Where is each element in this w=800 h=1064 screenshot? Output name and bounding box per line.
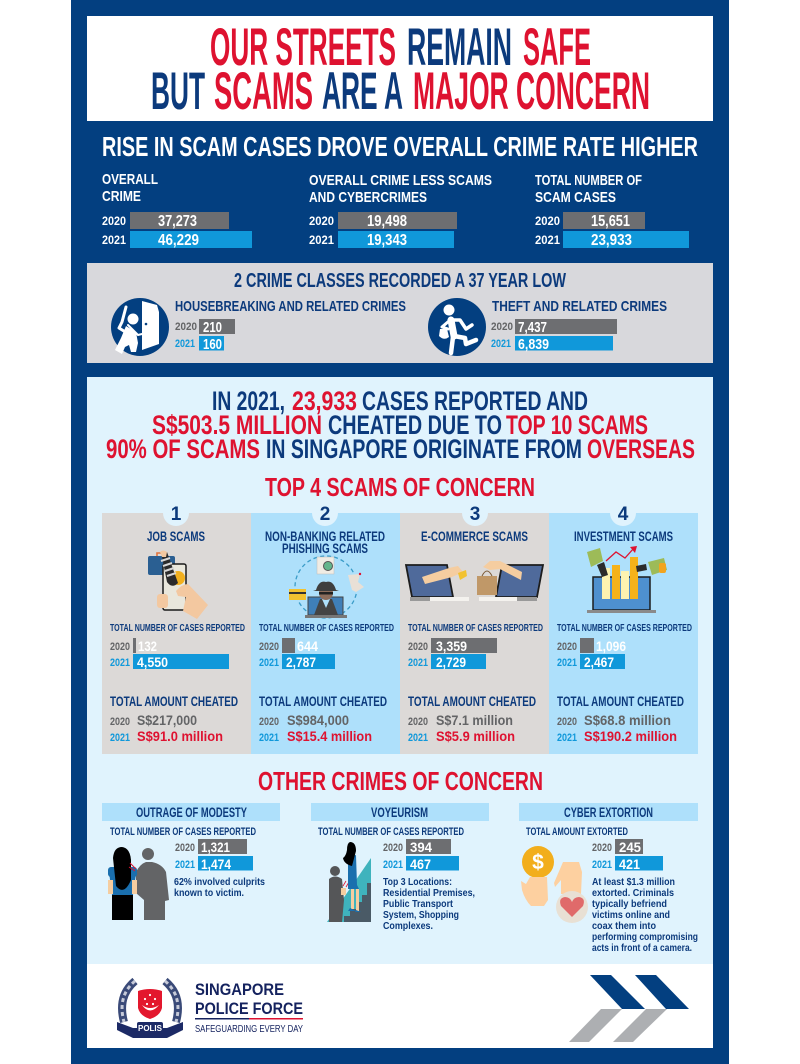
card 4: investment: INVESTMENT SCAMS	[574, 528, 673, 544]
icon: hands, coin and heart	[521, 846, 588, 923]
card 1: job scams: JOB SCAMS	[147, 528, 205, 544]
icon: running thief	[428, 298, 486, 356]
card 4: investment: TOTAL AMOUNT CHEATED	[557, 693, 684, 709]
headline: scam statistics	[106, 386, 695, 464]
icon: investment chart	[587, 546, 667, 613]
panel: cyber extortion: 245	[619, 839, 641, 855]
card 4: investment: 2020	[557, 641, 577, 653]
card 2: phishing: 2	[320, 504, 330, 525]
card 4: investment: 2020	[557, 716, 577, 728]
title: SCAMS	[214, 62, 313, 121]
card 1: job scams: 132	[138, 638, 157, 654]
icon: hands, coin and heart: $	[532, 851, 544, 874]
bars: theft: 2020	[491, 321, 513, 333]
card 4: investment	[549, 504, 698, 754]
stat: overall crime: OVERALL	[102, 171, 158, 188]
panel: cyber extortion: acts in front of a camera.	[592, 942, 692, 954]
title: BUT	[151, 62, 205, 121]
headline: scam statistics: 90% OF SCAMS	[106, 434, 260, 464]
panel: cyber extortion: performing compromising	[592, 931, 698, 943]
title: REMAIN	[407, 18, 512, 77]
headline: scam statistics: CASES REPORTED AND	[362, 386, 588, 416]
headline: scam statistics: IN 2021,	[212, 386, 285, 416]
stat: total number of scam cases: 2021	[535, 233, 560, 247]
panel: outrage of modesty: known to victim.	[174, 887, 244, 899]
panel: cyber extortion	[519, 803, 698, 954]
stat: overall crime less scams and cybercrimes	[309, 172, 492, 249]
card 2: phishing: S$984,000	[287, 712, 349, 728]
stat: total number of scam cases: 23,933	[591, 232, 632, 249]
panel: cyber extortion: 2020	[592, 842, 612, 854]
panel: outrage of modesty: 1,474	[201, 856, 231, 872]
stat: overall crime: 46,229	[158, 232, 199, 249]
panel: outrage of modesty: OUTRAGE OF MODESTY	[136, 805, 247, 820]
card 3: e-commerce: 2020	[408, 716, 428, 728]
stat: total number of scam cases	[535, 172, 689, 249]
stat: overall crime less scams and cybercrimes: 2020	[309, 214, 334, 228]
panel: cyber extortion: coax them into	[592, 920, 656, 932]
bars: theft: 2021	[491, 338, 511, 350]
card 1: job scams: 2021	[110, 732, 130, 744]
panel: voyeurism: Complexes.	[383, 920, 433, 932]
stat: overall crime: CRIME	[102, 188, 141, 205]
icon: job scam phone	[148, 550, 208, 619]
text: cases label: TOTAL NUMBER OF CASES REPORTED	[110, 622, 245, 634]
card 1: job scams: 2020	[110, 641, 130, 653]
card 2: phishing: 2021	[259, 657, 279, 669]
card 2: phishing: 2021	[259, 732, 279, 744]
logo: police crest	[117, 981, 183, 1038]
card 2: phishing: 644	[297, 638, 318, 654]
stat: overall crime: 2021	[102, 233, 126, 247]
panel: voyeurism: 394	[410, 839, 432, 855]
card 4: investment: TOTAL NUMBER OF CASES REPORTED	[557, 622, 692, 634]
panel: outrage of modesty	[102, 803, 280, 920]
headline: scam statistics: TOP 10 SCAMS	[506, 410, 648, 440]
card 4: investment: S$190.2 million	[584, 728, 677, 744]
text: amount cheated: TOTAL AMOUNT CHEATED	[110, 693, 238, 709]
chevrons	[569, 975, 689, 1042]
label: housebreaking: HOUSEBREAKING AND RELATED CRIMES	[175, 298, 406, 315]
panel: outrage of modesty: 2021	[175, 859, 195, 871]
panel: voyeurism: Public Transport	[383, 898, 453, 910]
headline: scam statistics: 23,933	[292, 386, 357, 416]
headline: scam statistics: S$503.5 MILLION	[152, 410, 322, 440]
bars: theft	[491, 319, 617, 353]
panel: cyber extortion: TOTAL AMOUNT EXTORTED	[526, 826, 628, 838]
title: OUR STREETS	[210, 18, 396, 77]
bars: housebreaking: 160	[203, 336, 222, 353]
panel: cyber extortion: 421	[619, 856, 640, 872]
panel: 37 year low	[87, 263, 713, 363]
card 1: job scams: 2021	[110, 657, 130, 669]
card 2: phishing: TOTAL AMOUNT CHEATED	[259, 693, 387, 709]
logo: wordmark: POLICE FORCE	[195, 999, 303, 1018]
card 2: phishing: S$15.4 million	[287, 728, 372, 744]
bars: housebreaking	[175, 319, 235, 353]
footer	[87, 964, 713, 1048]
panel: voyeurism: 467	[410, 856, 431, 872]
panel: voyeurism: Top 3 Locations:	[383, 876, 452, 888]
card 4: investment: 2021	[557, 657, 577, 669]
heading: top 4 scams: TOP 4 SCAMS OF CONCERN	[265, 472, 535, 502]
title: ARE A	[322, 62, 403, 121]
logo: wordmark: SAFEGUARDING EVERY DAY	[195, 1024, 303, 1035]
card 4: investment: S$68.8 million	[584, 712, 671, 728]
stat: overall crime	[102, 171, 252, 249]
title: SAFE	[523, 18, 591, 77]
icon: voyeur on stairs	[327, 842, 371, 922]
panel: outrage of modesty: 2020	[175, 842, 195, 854]
stat: total number of scam cases: 15,651	[591, 213, 630, 230]
card 1: job scams: 1	[171, 504, 182, 525]
card 2: phishing: TOTAL NUMBER OF CASES REPORTED	[259, 622, 394, 634]
panel: voyeurism: Residential Premises,	[383, 887, 475, 899]
title	[87, 16, 713, 121]
panel: cyber extortion: 2021	[592, 859, 612, 871]
bars: theft: 7,437	[518, 319, 547, 336]
card 2: phishing: 2020	[259, 716, 279, 728]
card 1: job scams: S$91.0 million	[137, 728, 223, 744]
card 1: job scams	[102, 504, 251, 754]
card 3: e-commerce: 2,729	[436, 654, 466, 670]
stat: total number of scam cases: TOTAL NUMBER OF	[535, 172, 642, 189]
card 3: e-commerce	[400, 504, 549, 754]
card 4: investment: 2,467	[584, 654, 614, 670]
panel: voyeurism: 2020	[383, 842, 403, 854]
bars: theft: 6,839	[518, 336, 549, 353]
bars: housebreaking: 2021	[175, 338, 195, 350]
card 3: e-commerce: 2021	[408, 732, 428, 744]
logo: police crest: POLIS	[138, 1024, 163, 1033]
card 3: e-commerce: E-COMMERCE SCAMS	[421, 528, 528, 544]
panel: voyeurism: VOYEURISM	[371, 805, 428, 820]
stat: overall crime less scams and cybercrimes: OVERALL CRIME LESS SCAMS	[309, 172, 492, 189]
panel: scams	[87, 377, 713, 964]
card 3: e-commerce: 3,359	[436, 638, 467, 654]
card 3: e-commerce: 3	[470, 504, 480, 525]
bars: housebreaking: 210	[203, 319, 222, 336]
bars: housebreaking: 2020	[175, 321, 197, 333]
heading: other crimes: OTHER CRIMES OF CONCERN	[258, 766, 543, 796]
card 3: e-commerce: S$7.1 million	[436, 712, 513, 728]
heading: 37 year low: 2 CRIME CLASSES RECORDED A 37 YEAR LOW	[234, 270, 566, 292]
panel: outrage of modesty: 1,321	[201, 839, 230, 855]
headline: scam statistics: OVERSEAS	[587, 434, 695, 464]
card 4: investment: 2021	[557, 732, 577, 744]
stat: overall crime: 2020	[102, 214, 126, 228]
logo: wordmark	[195, 980, 303, 1035]
panel: voyeurism: System, Shopping	[383, 909, 459, 921]
card 3: e-commerce: 2020	[408, 641, 428, 653]
panel: voyeurism	[311, 803, 489, 932]
card 4: investment: 4	[618, 504, 629, 525]
stat: overall crime less scams and cybercrimes: 19,498	[367, 213, 407, 230]
card 1: job scams: S$217,000	[137, 712, 197, 728]
label: theft: THEFT AND RELATED CRIMES	[492, 298, 667, 315]
headline: scam statistics: CHEATED DUE TO	[328, 410, 502, 440]
card 2: phishing: NON-BANKING RELATED	[265, 529, 385, 544]
panel: voyeurism: TOTAL NUMBER OF CASES REPORTED	[318, 826, 464, 838]
card 3: e-commerce: S$5.9 million	[436, 728, 515, 744]
card 2: phishing: 2020	[259, 641, 279, 653]
stat: overall crime less scams and cybercrimes: AND CYBERCRIMES	[309, 189, 427, 206]
card 2: phishing	[251, 504, 400, 754]
panel: cyber extortion: typically befriend	[592, 898, 667, 910]
card 1: job scams: 2020	[110, 716, 130, 728]
headline: scam statistics: IN SINGAPORE ORIGINATE FROM	[266, 434, 582, 464]
card 1: job scams: 4,550	[137, 654, 168, 670]
icon: e-commerce laptops	[406, 561, 543, 601]
stat: overall crime: 37,273	[158, 213, 197, 230]
panel: cyber extortion: At least $1.3 million	[592, 876, 675, 888]
card 4: investment: 1,096	[596, 638, 626, 654]
card 2: phishing: 2,787	[286, 654, 316, 670]
stat: overall crime less scams and cybercrimes: 19,343	[367, 232, 407, 249]
card 3: e-commerce: 2021	[408, 657, 428, 669]
stat: overall crime less scams and cybercrimes: 2021	[309, 233, 334, 247]
panel: outrage of modesty: TOTAL NUMBER OF CASES REPORTED	[110, 826, 256, 838]
logo: wordmark: SINGAPORE	[195, 980, 284, 999]
panel: cyber extortion: CYBER EXTORTION	[564, 805, 653, 820]
panel: cyber extortion: victims online and	[592, 909, 670, 921]
card 3: e-commerce: TOTAL AMOUNT CHEATED	[408, 693, 536, 709]
panel: cyber extortion: extorted. Criminals	[592, 887, 674, 899]
stat: total number of scam cases: 2020	[535, 214, 560, 228]
panel: outrage of modesty: 62% involved culprits	[174, 876, 265, 888]
panel: voyeurism: 2021	[383, 859, 403, 871]
icon: hacker	[289, 556, 364, 618]
card 3: e-commerce: TOTAL NUMBER OF CASES REPORTED	[408, 622, 543, 634]
icon: outrage silhouettes	[108, 847, 169, 920]
icon: housebreaker	[111, 298, 169, 356]
stat: total number of scam cases: SCAM CASES	[535, 189, 616, 206]
card 2: phishing: PHISHING SCAMS	[282, 541, 368, 556]
